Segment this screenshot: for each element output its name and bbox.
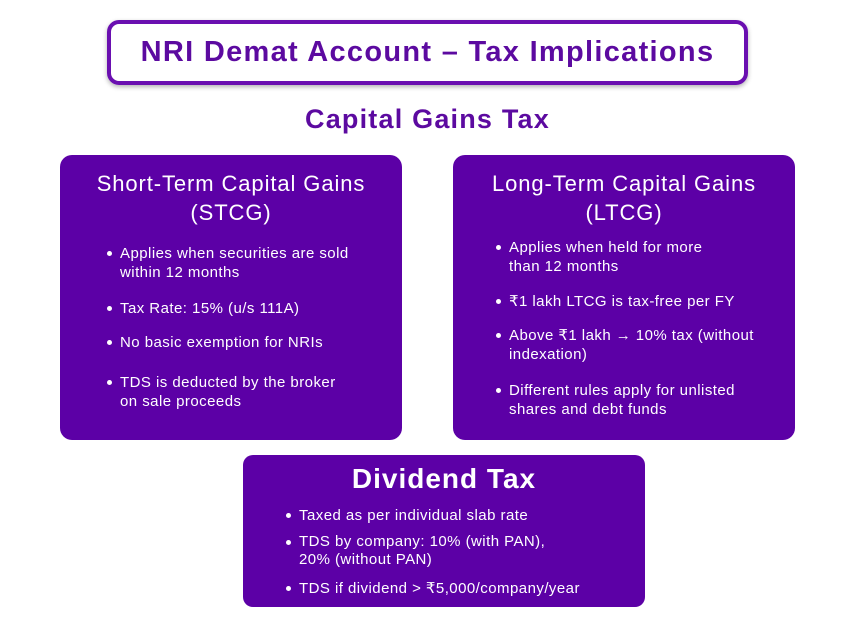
bullet list: Dividend: 20% (without PAN) [299,551,432,568]
bullet list: LTCG: Applies when held for more [509,239,702,256]
bullet list: STCG: Tax Rate: 15% (u/s 111A) [120,300,300,317]
heading: Dividend Tax: Dividend Tax [352,463,536,494]
bullet list: LTCG: ₹1 lakh LTCG is tax-free per FY [509,293,735,310]
bullet list: LTCG: Above ₹1 lakh → 10% tax (without [509,327,754,344]
bullet list: LTCG: indexation) [509,346,587,363]
panel: STCG [60,155,402,440]
title box: NRI Demat Account – Tax Implications [141,36,714,68]
bullet list: Dividend [286,507,580,597]
heading: STCG [97,171,365,225]
bullet list: STCG: Applies when securities are sold [120,245,349,262]
panel: LTCG [453,155,795,440]
bullet list: Dividend: TDS by company: 10% (with PAN), [299,533,545,550]
bullet list: LTCG: shares and debt funds [509,401,667,418]
bullet list: STCG: TDS is deducted by the broker [120,374,336,391]
bullet list: STCG [107,245,349,410]
bullet list: LTCG [496,239,754,418]
heading: STCG: Short-Term Capital Gains [97,171,365,196]
heading: LTCG: Long-Term Capital Gains [492,171,756,196]
heading: LTCG [492,171,756,225]
panel: Dividend Tax [243,455,645,607]
bullet list: LTCG: Different rules apply for unlisted [509,382,735,399]
bullet list: STCG: on sale proceeds [120,393,241,410]
bullet list: Dividend: TDS if dividend > ₹5,000/company/year [299,580,580,597]
subtitle: Capital Gains Tax: Capital Gains Tax [305,104,550,134]
bullet list: Dividend: Taxed as per individual slab rate [299,507,528,524]
bullet list: STCG: No basic exemption for NRIs [120,334,323,351]
bullet list: STCG: within 12 months [120,264,240,281]
bullet list: LTCG: than 12 months [509,258,619,275]
heading: LTCG: (LTCG) [585,200,663,225]
heading: STCG: (STCG) [190,200,272,225]
title box [107,20,748,85]
